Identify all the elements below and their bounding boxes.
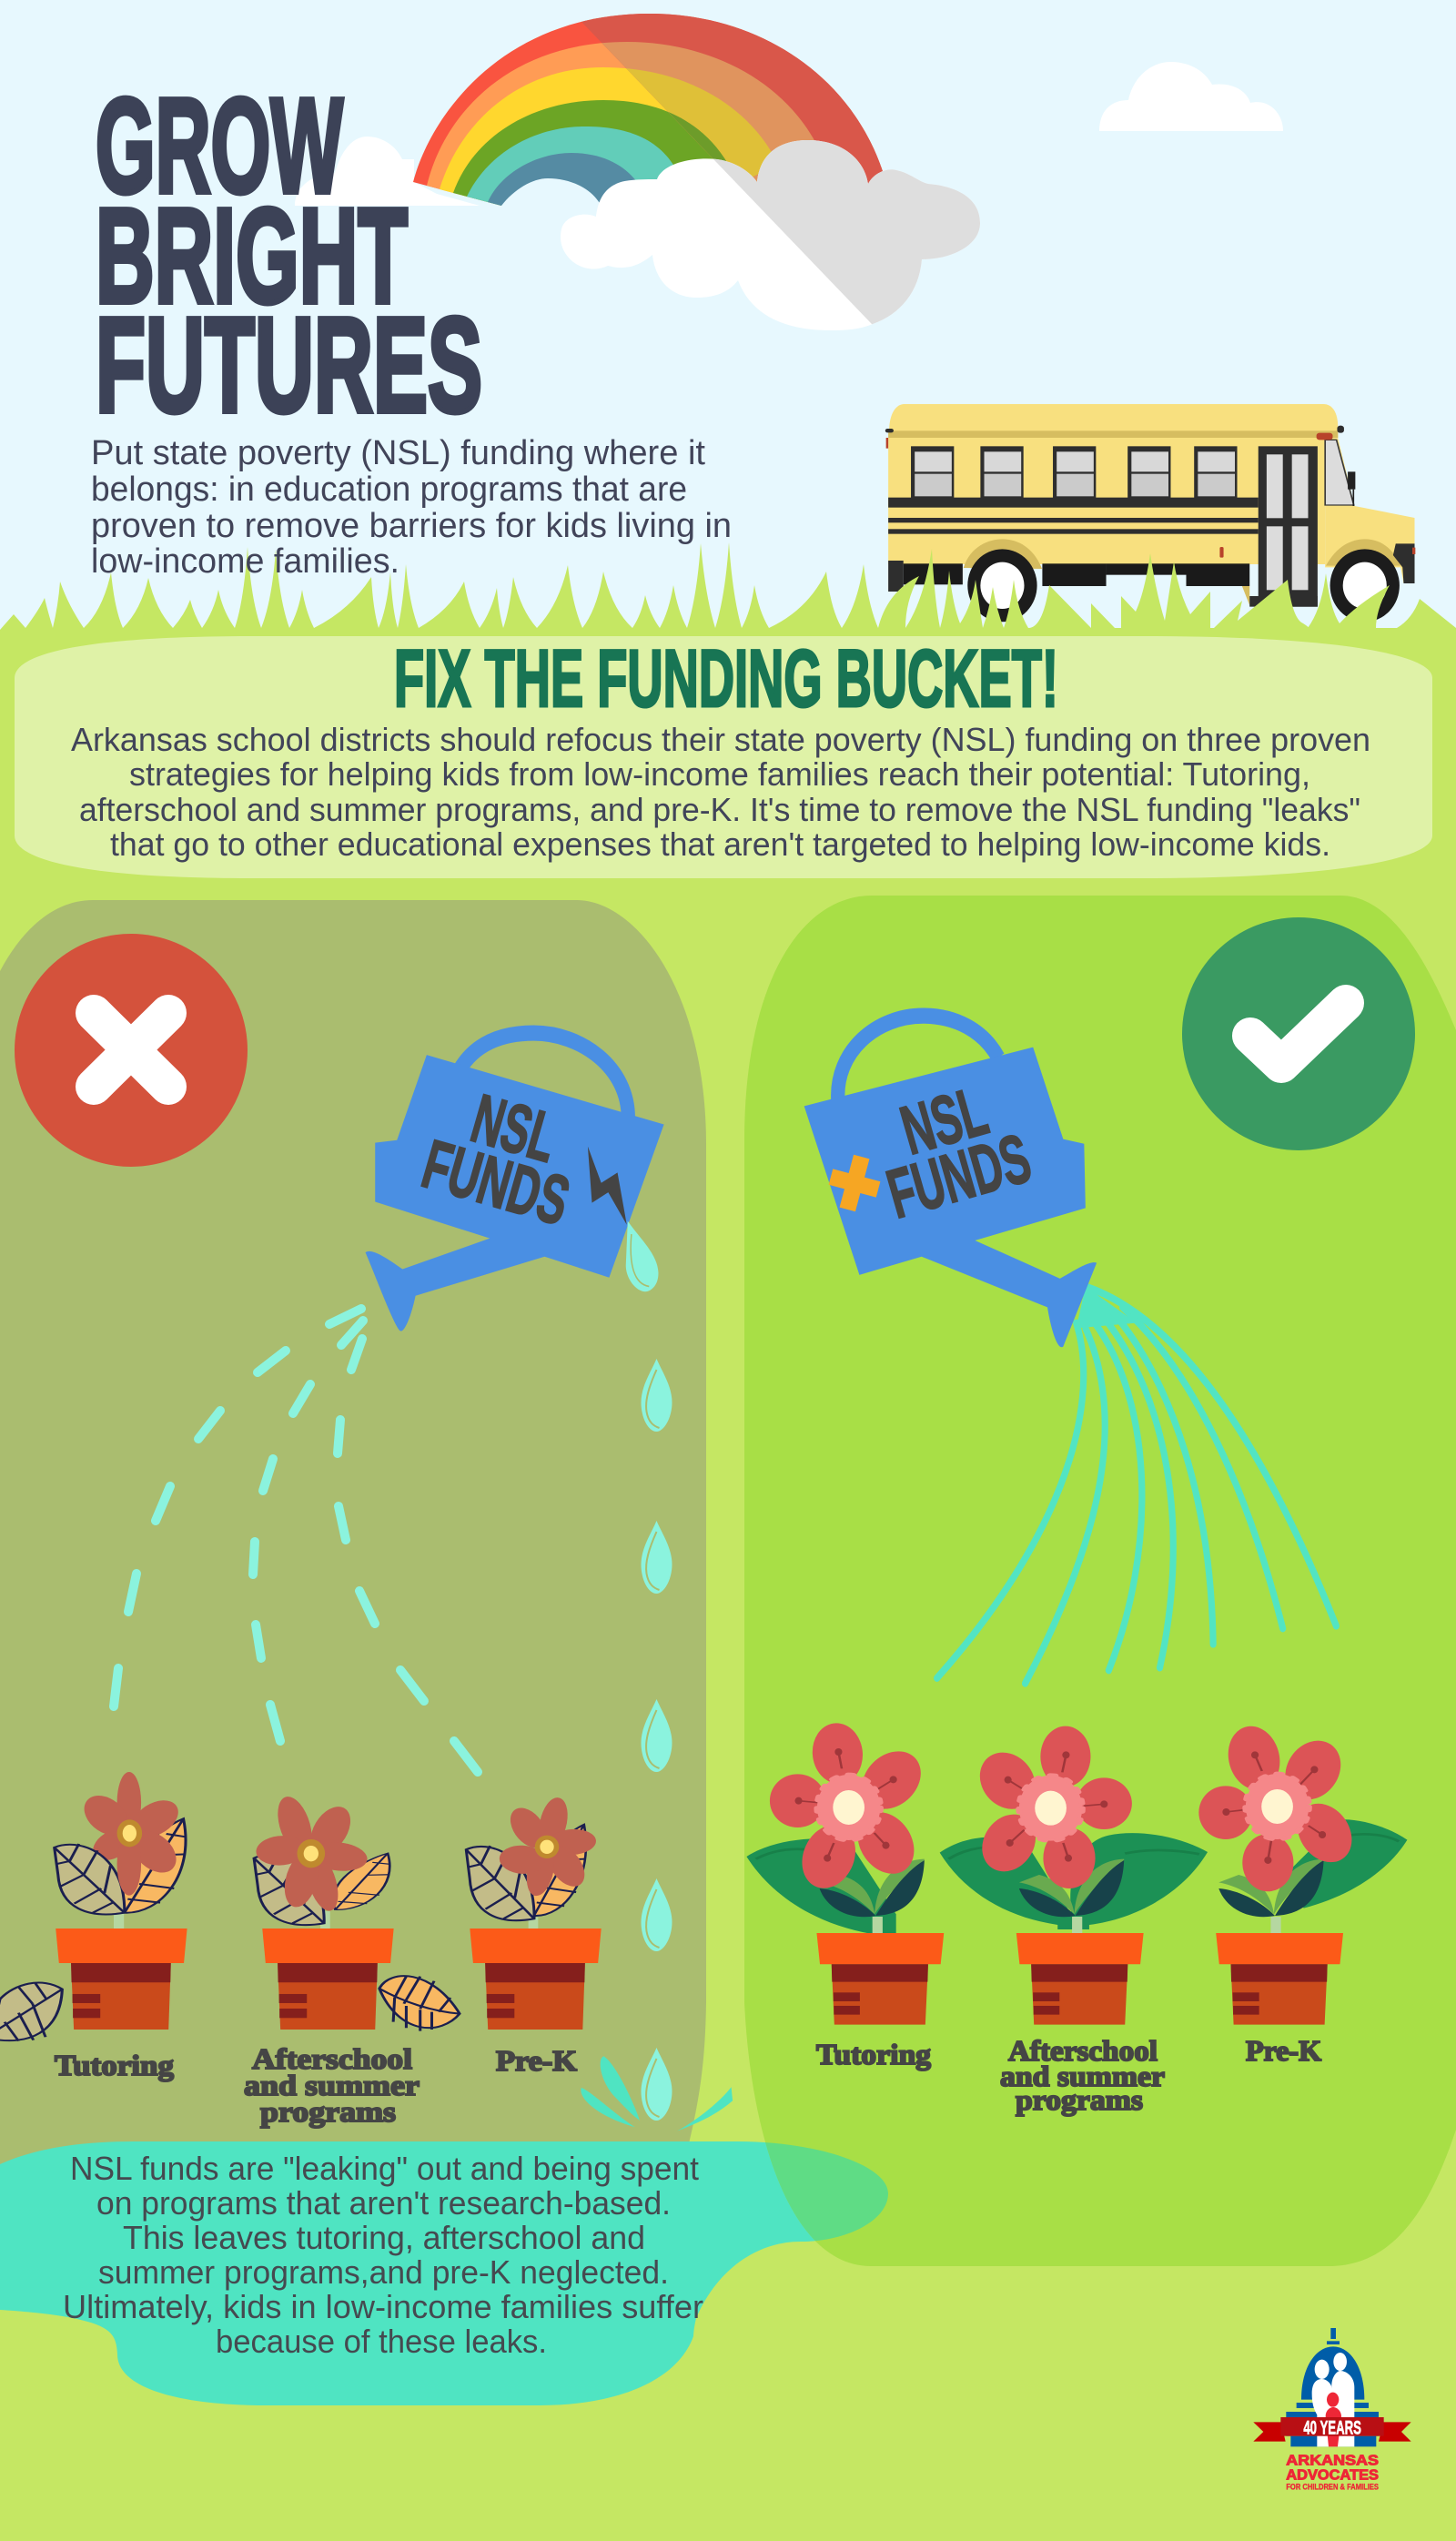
heading: fix the funding bucket: FIX THE FUNDING BUCKET! xyxy=(394,633,1058,724)
rainbow with cloud xyxy=(413,14,980,330)
labels: right flowers: and summer xyxy=(1000,2060,1165,2092)
title: GROW xyxy=(96,71,343,221)
fallen grey leaf xyxy=(0,1982,62,2041)
intro text xyxy=(71,721,1370,863)
labels: left flowers: programs xyxy=(260,2095,396,2128)
logo: arkansas advocates: FOR CHILDREN & FAMILIES xyxy=(1286,2483,1379,2492)
intro text: Arkansas school districts should refocus their state poverty (NSL) funding on three proven xyxy=(71,721,1370,758)
panel: right way xyxy=(744,896,1456,2266)
labels: left flowers xyxy=(55,2042,577,2128)
labels: left flowers: and summer xyxy=(244,2069,420,2101)
healthy flower: tutoring xyxy=(746,1723,944,2025)
intro text: afterschool and summer programs, and pre-K. It's time to remove the NSL funding "leaks" xyxy=(79,791,1360,828)
subtitle: proven to remove barriers for kids living in xyxy=(91,507,732,545)
panel: wrong way xyxy=(0,900,706,2184)
title: FUTURES xyxy=(96,290,482,440)
labels: right flowers: Afterschool xyxy=(1008,2034,1158,2067)
logo: arkansas advocates xyxy=(1253,2328,1411,2492)
healthy flower: afterschool xyxy=(940,1726,1208,2025)
watering can: leaking: FUNDS xyxy=(414,1126,577,1240)
watering can: healthy: FUNDS xyxy=(879,1119,1039,1233)
teal puddle xyxy=(0,2141,888,2405)
intro text: strategies for helping kids from low-income families reach their potential: Tutoring, xyxy=(129,755,1310,793)
grass and ground xyxy=(0,542,1456,2541)
splash xyxy=(581,2056,733,2131)
wilted flower: afterschool xyxy=(249,1795,394,2030)
cloud: behind title xyxy=(295,137,480,206)
wilted flower: pre-k xyxy=(466,1797,602,2030)
labels: left flowers: Tutoring xyxy=(55,2049,174,2081)
labels: left flowers: Pre-K xyxy=(496,2044,577,2077)
icon: orange plus xyxy=(824,1150,885,1216)
water streams xyxy=(937,1286,1336,1684)
falling drops xyxy=(641,1359,672,2121)
wilted flowers xyxy=(0,1772,602,2041)
puddle text: summer programs,and pre-K neglected. xyxy=(98,2253,669,2291)
puddle text xyxy=(63,2150,703,2360)
subtitle xyxy=(91,434,732,581)
intro text: that go to other educational expenses that aren't targeted to helping low-income kids. xyxy=(110,825,1330,863)
puddle text: because of these leaks. xyxy=(216,2323,547,2360)
fallen orange leaf xyxy=(379,1976,460,2031)
icon: green check xyxy=(1182,917,1415,1150)
wilted flower: tutoring xyxy=(55,1772,187,2030)
healthy flower: pre-k xyxy=(1198,1725,1407,2025)
labels: right flowers: programs xyxy=(1016,2083,1143,2116)
subtitle: low-income families. xyxy=(91,542,399,581)
subtitle: Put state poverty (NSL) funding where it xyxy=(91,434,705,472)
school bus xyxy=(885,404,1415,622)
puddle text: This leaves tutoring, afterschool and xyxy=(123,2219,645,2256)
logo: arkansas advocates: ADVOCATES xyxy=(1286,2467,1379,2483)
watering can: leaking xyxy=(366,1033,664,1331)
labels: right flowers: Pre-K xyxy=(1246,2034,1321,2067)
logo: arkansas advocates: ARKANSAS xyxy=(1286,2453,1379,2468)
labels: right flowers xyxy=(816,2034,1321,2116)
watering can: leaking: NSL xyxy=(463,1080,565,1178)
puddle text: on programs that aren't research-based. xyxy=(96,2184,671,2222)
puddle overlap with right panel xyxy=(765,2142,888,2241)
icon: red x xyxy=(15,934,248,1167)
puddle text: Ultimately, kids in low-income families suffer xyxy=(63,2288,703,2325)
watering can: healthy: NSL xyxy=(893,1072,996,1169)
labels: left flowers: Afterschool xyxy=(252,2042,412,2075)
dashed water arcs xyxy=(114,1309,478,1772)
title xyxy=(96,71,482,440)
watering can: healthy xyxy=(804,1016,1336,1684)
cloud: small top right xyxy=(1099,62,1283,131)
title: BRIGHT xyxy=(96,181,408,331)
subtitle: belongs: in education programs that are xyxy=(91,471,687,509)
labels: right flowers: Tutoring xyxy=(816,2038,931,2070)
panel: fix the funding bucket xyxy=(15,633,1432,878)
puddle text: NSL funds are "leaking" out and being spent xyxy=(70,2150,699,2187)
logo: arkansas advocates: 40 YEARS xyxy=(1303,2416,1361,2438)
healthy flowers xyxy=(746,1723,1407,2025)
